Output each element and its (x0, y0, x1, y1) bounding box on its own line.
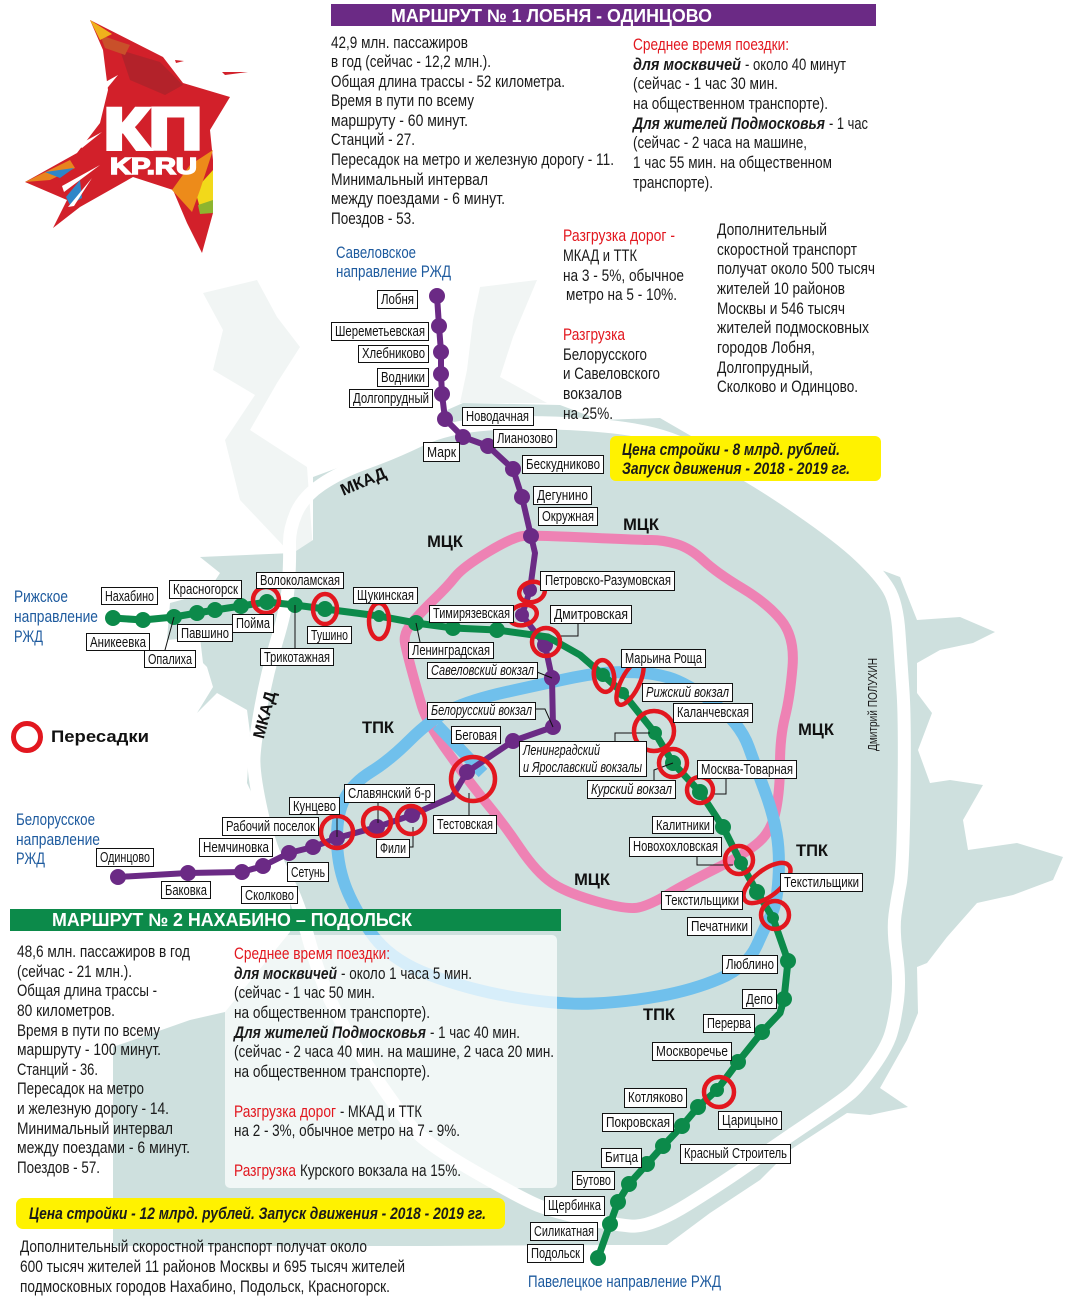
station: Тушино: Тушино (311, 628, 348, 644)
map background: Moscow territory (113, 280, 1063, 1246)
text block: route 2 stats: Время в пути по всему (17, 1022, 161, 1040)
text block: route 1 stats: Станций - 27. (331, 131, 415, 149)
text block: route 2 stats: Минимальный интервал (17, 1120, 173, 1138)
station: Щербинка (544, 1196, 604, 1216)
heading: маршрут 1: МАРШРУТ № 1 ЛОБНЯ - ОДИНЦОВО (391, 6, 712, 26)
station: Печатники: Печатники (691, 919, 748, 935)
text block: route 1 additional transport: жителей 10 районов (717, 280, 845, 298)
heading: маршрут 2: МАРШРУТ № 2 НАХАБИНО – ПОДОЛЬСК (52, 910, 413, 930)
callout: route 1 price: Запуск движения - 2018 - 2019 гг. (622, 460, 850, 478)
station: Дмитровская: Дмитровская (554, 607, 628, 623)
station: Одинцово (96, 848, 154, 866)
text block: route 1 additional transport: Москвы и 546 тысяч (717, 300, 845, 318)
station: Красногорск: Красногорск (173, 582, 239, 598)
station: Тушино (308, 626, 352, 644)
station: Ленинградская: Ленинградская (412, 643, 490, 659)
station: Новохохловская (630, 838, 722, 856)
text block: route 1 additional transport: Сколково и Одинцово. (717, 378, 858, 396)
text block: route 1 stats: Время в пути по всему (331, 92, 475, 110)
text block: route 1 road relief: на 3 - 5%, обычное (563, 267, 684, 285)
text block: route 2 stats: между поездами - 6 минут. (17, 1139, 190, 1157)
station: Подольск: Подольск (531, 1246, 581, 1262)
text block: route 2 stats: и железную дорогу - 14. (17, 1100, 169, 1118)
text block: route 2 travel time and relief: на 2 - 3%, обычное метро на 7 - 9%. (234, 1122, 460, 1140)
text block: route 2 travel time and relief: на общественном транспорте). (234, 1063, 430, 1081)
station: Люблино: Люблино (726, 957, 774, 973)
line: маршрут 1 (110, 288, 561, 885)
text block: route 1 additional transport: Долгопрудный, (717, 359, 813, 377)
station: Перерва (704, 1014, 754, 1032)
text block: route 2 travel time and relief: для москвичей (234, 965, 337, 983)
station: Новохохловская: Новохохловская (633, 839, 718, 855)
text block: route 1 road relief: метро на 5 - 10%. (566, 286, 677, 304)
map labels: МКАД, МЦК, ТПК: МЦК (574, 871, 611, 889)
text block: route 1 travel time: (сейчас - 1 час 30 мин. (633, 75, 778, 93)
station: Славянский б-р: Славянский б-р (348, 786, 431, 802)
text block: route 1 stats (331, 34, 614, 228)
text block: route 1 travel time: Для жителей Подмосковья (631, 115, 825, 133)
text block: route 2 stats: Общая длина трассы - (17, 982, 157, 1000)
station: Москворечье: Москворечье (656, 1044, 728, 1060)
station: Савеловский вокзал: Савеловский вокзал (431, 663, 534, 679)
station: Трикотажная: Трикотажная (264, 650, 330, 666)
station: Текстильщики (МЦК): Текстильщики (784, 875, 859, 891)
station: Ленинградский и Ярославский вокзалы: и Ярославский вокзалы (523, 760, 642, 776)
direction: Савеловское: направление РЖД (336, 263, 451, 281)
map labels: МКАД, МЦК, ТПК: МКАД (250, 689, 280, 741)
text block: route 2 travel time and relief: Курского вокзала на 15%. (300, 1162, 461, 1180)
line: маршрут 2 (105, 594, 796, 1266)
station: Лианозово: Лианозово (497, 431, 553, 447)
map labels: МКАД, МЦК, ТПК: МЦК (427, 533, 464, 551)
direction: Белорусское (16, 811, 100, 868)
station: Рижский вокзал: Рижский вокзал (646, 685, 729, 701)
logo: KP star: КП (104, 97, 202, 162)
station: Новодачная: Новодачная (466, 409, 529, 425)
map labels: МКАД, МЦК, ТПК: МКАД (338, 464, 389, 500)
text block: route 2 travel time and relief: Разгрузка дорог (234, 1103, 336, 1121)
direction: Рижское: РЖД (14, 628, 43, 646)
text block: route 2 stats: Поездов - 57. (17, 1159, 100, 1177)
text block: route 2 travel time and relief: Для жителей Подмосковья (232, 1024, 426, 1042)
station: Красный Строитель (680, 1144, 790, 1164)
station: Бескудниково: Бескудниково (526, 457, 600, 473)
station: Ленинградский и Ярославский вокзалы (520, 742, 646, 776)
station: Щукинская: Щукинская (357, 588, 414, 604)
station: Сетунь: Сетунь (291, 865, 325, 881)
panel: route 2 details background (225, 935, 557, 1188)
station: Фили (376, 840, 410, 858)
leader lines (165, 605, 733, 865)
map labels: МКАД, МЦК, ТПК (250, 464, 835, 1024)
station: Котляково: Котляково (628, 1090, 683, 1106)
callout: route 2 price: Цена стройки - 12 млрд. рублей. Запуск движения - 2018 - 2019 гг. (29, 1205, 486, 1223)
interchange rings (253, 579, 797, 1107)
callout: route 2 price (16, 1198, 505, 1229)
station: Тимирязевская: Тимирязевская (433, 606, 510, 622)
text block: route 1 road relief (563, 227, 684, 423)
station: Депо (742, 990, 776, 1008)
text block: route 2 travel time and relief: (сейчас - 1 час 50 мин. (234, 984, 375, 1002)
legend: Пересадки: Пересадки (51, 727, 149, 746)
text block: route 1 road relief: вокзалов (563, 385, 622, 403)
map labels: МКАД, МЦК, ТПК: МЦК (798, 721, 835, 739)
text block: route 2 stats: Пересадок на метро (17, 1080, 144, 1098)
text block: route 1 travel time: Среднее время поездки: (633, 36, 789, 54)
text block: route 2 stats: Станций - 36. (17, 1061, 98, 1079)
station: Силикатная: Силикатная (534, 1224, 594, 1240)
text block: route 1 stats: маршруту - 60 минут. (331, 112, 468, 130)
station: Пойма: Пойма (236, 616, 271, 632)
station: Шереметьевская: Шереметьевская (335, 324, 425, 340)
direction: Савеловское (336, 244, 451, 281)
text block: route 2 travel time and relief: - МКАД и ТТК (340, 1103, 422, 1121)
station: Долгопрудный: Долгопрудный (353, 391, 429, 407)
station: Царицыно: Царицыно (722, 1113, 778, 1129)
station: Котляково (624, 1088, 686, 1108)
station: Красный Строитель: Красный Строитель (684, 1146, 787, 1162)
station: Бутово (572, 1172, 614, 1190)
station: Беговая: Беговая (455, 728, 497, 744)
station: Каланчевская (674, 704, 752, 722)
text block: route 2 travel time and relief: Разгрузка (234, 1162, 297, 1180)
direction: Рижское: направление (14, 608, 98, 626)
station: Павшино: Павшино (181, 626, 229, 642)
station: Водники: Водники (381, 370, 425, 386)
station: Силикатная (530, 1222, 598, 1240)
map labels: МКАД, МЦК, ТПК: ТПК (796, 842, 829, 860)
text block: route 1 stats: 42,9 млн. пассажиров (331, 34, 468, 52)
text block: route 1 stats: Минимальный интервал (331, 171, 488, 189)
station: Покровская: Покровская (606, 1115, 670, 1131)
text block: route 1 additional transport: городов Лобня, (717, 339, 815, 357)
text block: route 1 road relief: Разгрузка (563, 326, 626, 344)
text block: route 1 travel time: - 1 час (829, 115, 868, 133)
text block: route 1 travel time: - около 40 минут (745, 56, 846, 74)
text block: route 1 travel time: транспорте). (633, 174, 713, 192)
station: Каланчевская: Каланчевская (677, 705, 749, 721)
direction: Рижское: Рижское (14, 588, 68, 606)
text block: route 1 travel time: 1 час 55 мин. на общественном (633, 154, 832, 172)
logo: KP star: KP.RU (110, 153, 197, 179)
logo: KP star (25, 20, 248, 253)
station: Тестовская: Тестовская (437, 817, 493, 833)
station: Москва-Товарная: Москва-Товарная (701, 762, 793, 778)
station: Рабочий поселок: Рабочий поселок (226, 819, 316, 835)
station: Лобня: Лобня (381, 292, 414, 308)
line: ТПК ring (337, 672, 779, 1004)
author credit: Дмитрий ПОЛУХИН (865, 658, 880, 751)
text block: route 1 additional transport (717, 221, 875, 396)
text block: route 2 additional transport (20, 1238, 405, 1296)
text block: route 2 travel time and relief (232, 945, 554, 1180)
station: Текстильщики: Текстильщики (665, 893, 739, 909)
text block: route 1 travel time: на общественном транспорте). (633, 95, 828, 113)
text block: route 2 stats (17, 943, 190, 1177)
station: Марьина Роща: Марьина Роща (625, 651, 703, 667)
station: Марьина Роща (622, 650, 706, 668)
station: Окружная: Окружная (542, 509, 594, 525)
station: Ленинградский и Ярославский вокзалы: Ленинградский (522, 743, 600, 759)
direction: Павелецкое: Павелецкое направление РЖД (528, 1273, 721, 1291)
text block: route 2 stats: 48,6 млн. пассажиров в год (17, 943, 190, 961)
text block: route 1 additional transport: получат около 500 тысяч (717, 260, 875, 278)
station: Кунцево: Кунцево (293, 799, 336, 815)
text block: route 1 stats: между поездами - 6 минут. (331, 190, 505, 208)
heading: маршрут 2 (10, 909, 561, 931)
text block: route 1 travel time: (сейчас - 2 часа на машине, (633, 134, 807, 152)
text block: route 1 road relief: и Савеловского (563, 365, 660, 383)
station: Фили: Фили (380, 841, 406, 857)
text block: route 1 travel time (631, 36, 868, 192)
text block: route 2 travel time and relief: - 1 час 40 мин. (430, 1024, 520, 1042)
text block: route 2 stats: 80 километров. (17, 1002, 115, 1020)
text block: route 2 stats: маршруту - 100 минут. (17, 1041, 161, 1059)
direction: Белорусское: направление (16, 831, 100, 849)
station: Битца: Битца (605, 1150, 639, 1166)
text block: route 1 stats: Поездов - 53. (331, 210, 415, 228)
text block: route 1 road relief: на 25%. (563, 405, 613, 423)
text block: route 1 additional transport: жителей подмосковных (717, 319, 870, 337)
direction: Рижское (14, 588, 98, 646)
text block: route 2 travel time and relief: на общественном транспорте). (234, 1004, 430, 1022)
callout: route 1 price: Цена стройки - 8 млрд. рублей. (622, 441, 840, 459)
direction: Белорусское: РЖД (16, 850, 45, 868)
station: Петровско-Разумовская: Петровско-Разумовская (545, 573, 671, 589)
station: Тестовская (434, 816, 496, 834)
legend: Пересадки (14, 724, 149, 750)
text block: route 2 additional transport: подмосковных городов Нахабино, Подольск, Красногорск. (20, 1278, 390, 1296)
text block: route 1 road relief: Белорусского (563, 346, 647, 364)
station: Аникеевка: Аникеевка (90, 635, 147, 651)
station: Щербинка: Щербинка (548, 1198, 602, 1214)
text block: route 1 road relief: МКАД и ТТК (563, 247, 637, 265)
station: Депо: Депо (746, 992, 773, 1008)
station: Бутово: Бутово (576, 1173, 611, 1189)
text block: route 1 stats: Пересадок на метро и железную дорогу - 11. (331, 151, 614, 169)
station: Одинцово: Одинцово (100, 850, 150, 866)
map labels: МКАД, МЦК, ТПК: ТПК (643, 1006, 676, 1024)
text block: route 2 additional transport: Дополнительный скоростной транспорт получат около (20, 1238, 367, 1256)
direction: Белорусское: Белорусское (16, 811, 95, 829)
text block: route 1 additional transport: скоростной транспорт (717, 241, 857, 259)
station: Сетунь (288, 862, 328, 882)
text block: route 1 travel time: для москвичей (633, 56, 741, 74)
text block: route 2 travel time and relief: (сейчас - 2 часа 40 мин. на машине, 2 часа 20 мин. (234, 1043, 554, 1061)
station: Дегунино: Дегунино (537, 488, 588, 504)
station: Сколково: Сколково (245, 888, 294, 904)
text block: route 1 road relief: Разгрузка дорог - (563, 227, 675, 245)
station: Волоколамская: Волоколамская (260, 573, 340, 589)
text block: route 2 additional transport: 600 тысяч жителей 11 районов Москвы и 695 тысяч жителей (20, 1258, 405, 1276)
station: Петровско-Разумовская (540, 572, 674, 590)
heading: маршрут 1 (331, 4, 876, 26)
station: Марк: Марк (427, 445, 457, 461)
station: Калитники: Калитники (656, 818, 710, 834)
station: Перерва: Перерва (707, 1016, 752, 1032)
text block: route 2 travel time and relief: - около 1 часа 5 мин. (341, 965, 472, 983)
text block: route 1 additional transport: Дополнительный (717, 221, 827, 239)
text block: route 2 travel time and relief: Среднее время поездки: (234, 945, 390, 963)
text block: route 2 stats: (сейчас - 21 млн.). (17, 963, 132, 981)
station: Белорусский вокзал: Белорусский вокзал (431, 703, 532, 719)
station: Опалиха: Опалиха (148, 652, 193, 668)
station labels: маршрут 2 (86, 572, 862, 1262)
station: Хлебниково: Хлебниково (362, 346, 425, 362)
station: Немчиновка: Немчиновка (203, 840, 270, 856)
station: Нахабино: Нахабино (105, 589, 154, 605)
line: МЦК ring (405, 536, 793, 908)
map labels: МКАД, МЦК, ТПК: ТПК (362, 719, 395, 737)
station: Баковка: Баковка (165, 883, 208, 899)
map labels: МКАД, МЦК, ТПК: МЦК (623, 516, 660, 534)
text block: route 1 stats: в год (сейчас - 12,2 млн.). (331, 53, 491, 71)
callout: route 1 price (610, 436, 881, 481)
direction: Савеловское: Савеловское (336, 244, 416, 262)
station: Курский вокзал: Курский вокзал (591, 782, 672, 798)
text block: route 1 stats: Общая длина трассы - 52 километра. (331, 73, 565, 91)
station labels: маршрут 1 (96, 290, 674, 904)
